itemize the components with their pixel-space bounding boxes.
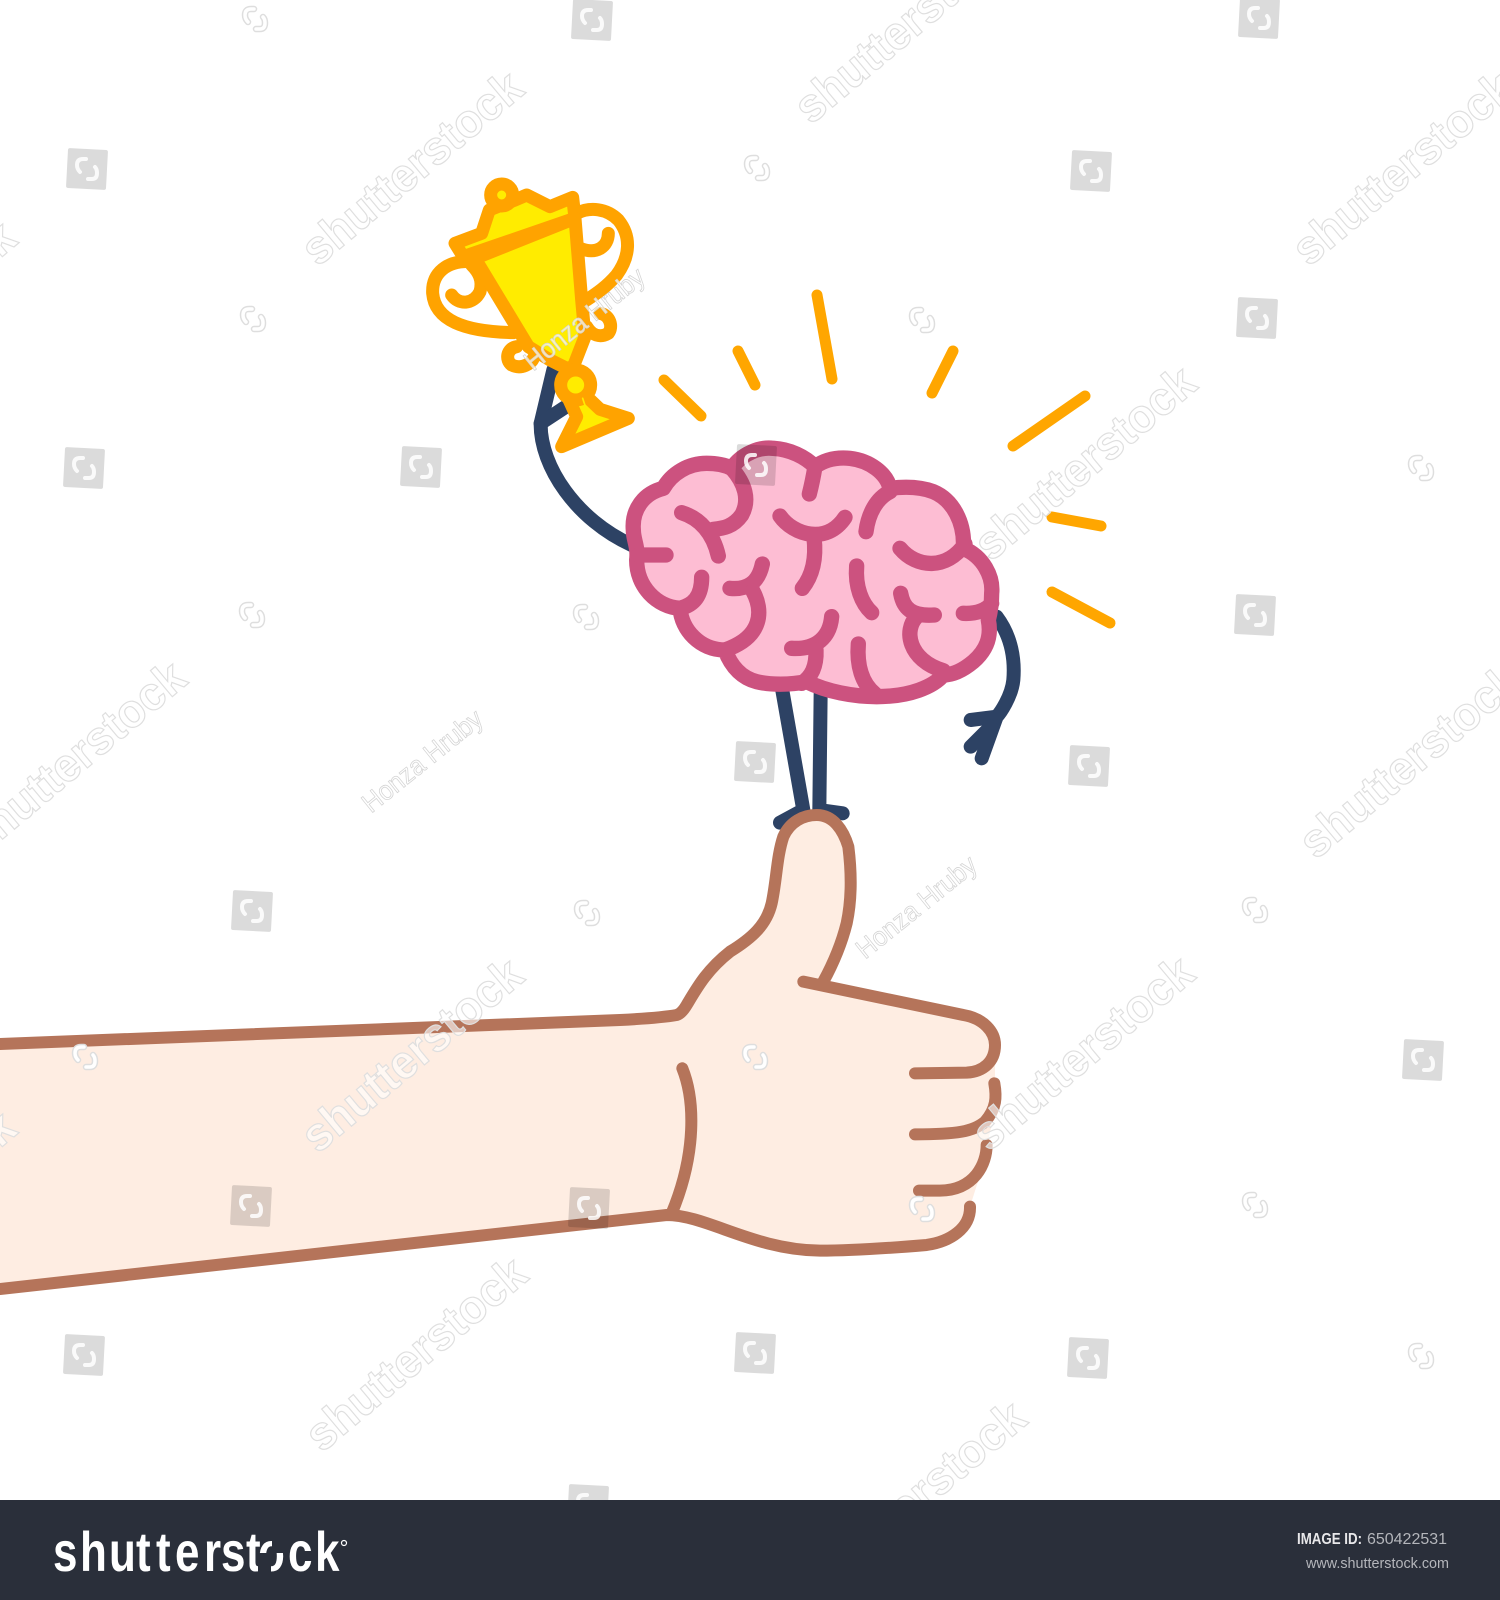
watermark: shutterstock text: shutterstock <box>290 946 533 1162</box>
watermark: author name: Honza Hruby <box>850 849 983 964</box>
footer logo: shutterstock <box>53 1520 340 1583</box>
footer image id: IMAGE ID: <box>1297 1531 1362 1548</box>
trophy ball <box>561 370 591 400</box>
watermark: author name <box>356 261 983 964</box>
watermark: shutterstock text: shutterstock <box>290 59 533 275</box>
watermark: shutterstock text: shutterstock <box>294 1245 537 1461</box>
watermark: small logo outlines <box>75 9 1431 1366</box>
trophy stem highlight <box>583 398 589 418</box>
watermark: author name: Honza Hruby <box>518 261 651 376</box>
footer website: www.shutterstock.com <box>1305 1556 1449 1572</box>
trophy knob <box>491 184 513 206</box>
right arm of the brain <box>971 617 1014 758</box>
watermark: shutterstock text: shutterstock <box>793 1389 1036 1600</box>
trophy <box>433 184 628 447</box>
footer image id: 650422531 <box>1367 1531 1447 1548</box>
trophy handles <box>433 209 628 367</box>
left arm holding the trophy <box>541 370 632 545</box>
hand and arm <box>0 815 996 1289</box>
trophy lid <box>455 195 575 257</box>
watermark: author name: Honza Hruby <box>356 703 489 818</box>
footer bar <box>0 1500 1500 1600</box>
watermark: shutterstock text: shutterstock <box>963 354 1206 570</box>
trophy cup <box>475 218 585 368</box>
trophy base and stem <box>562 395 628 447</box>
shine rays <box>664 295 1110 623</box>
brain <box>633 448 992 697</box>
watermark: shutterstock text: shutterstock <box>961 944 1204 1160</box>
footer image id <box>1297 1531 1447 1548</box>
legs and feet <box>780 687 843 823</box>
